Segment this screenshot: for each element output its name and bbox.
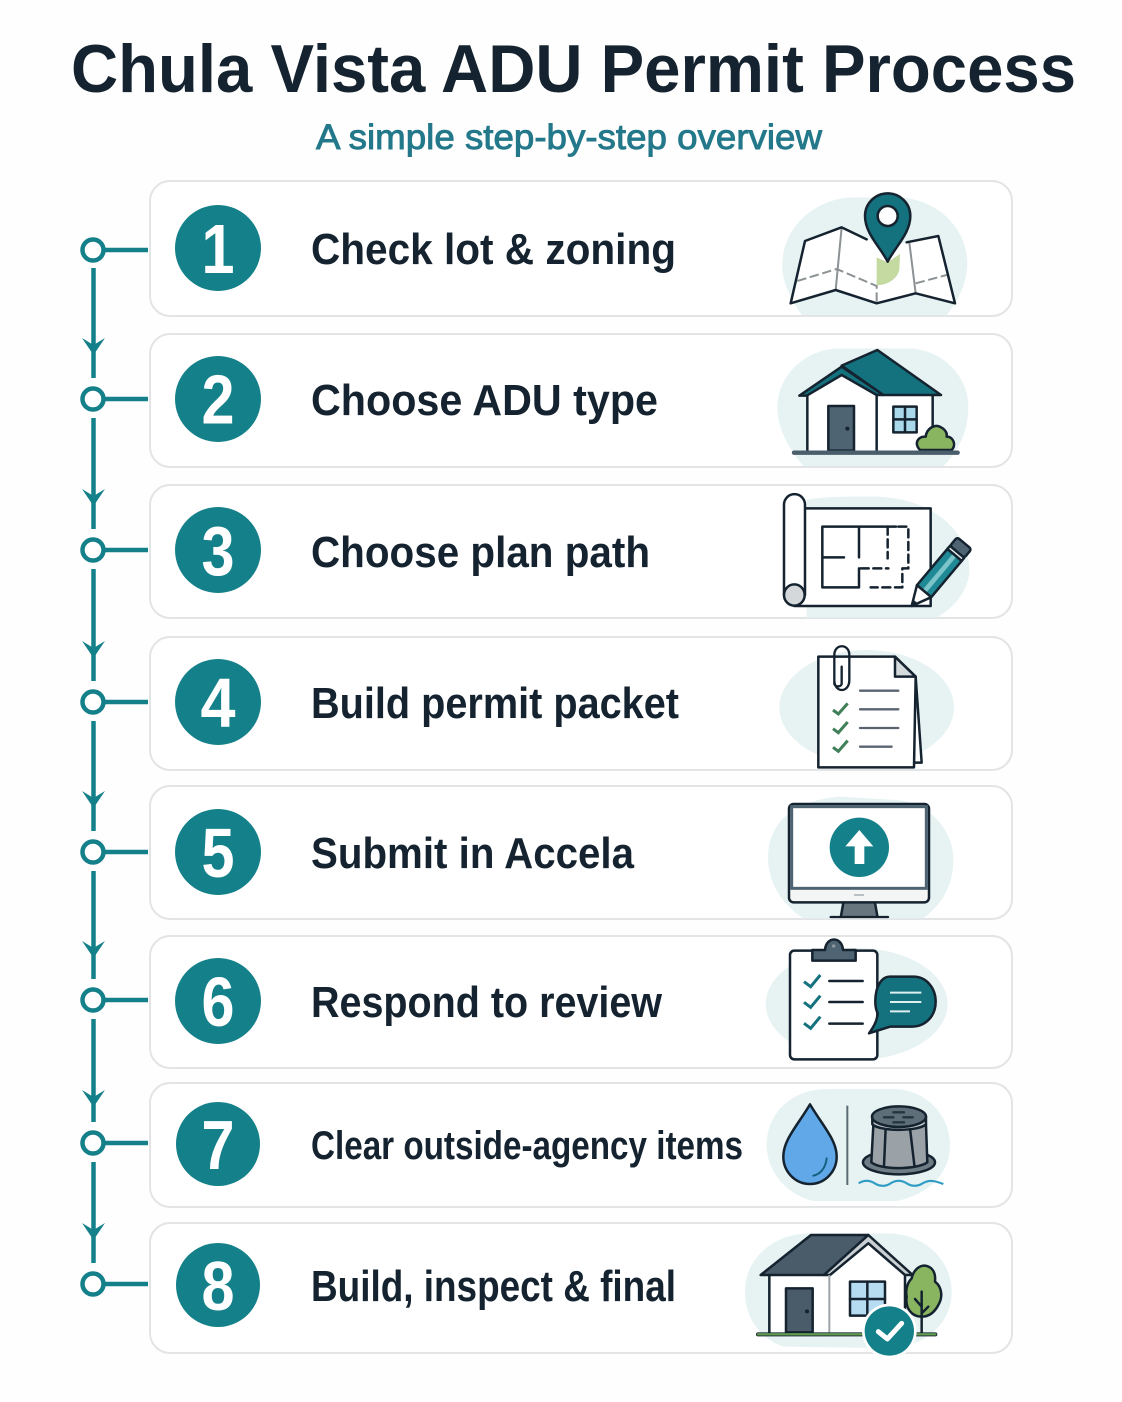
step 8 panel [150,1223,1012,1358]
step 1 panel [150,181,1012,316]
step 5 label: Submit in Accela [311,829,634,878]
step 6 label: Respond to review [311,978,663,1027]
subtitle: A simple step-by-step overview [316,118,823,157]
number badge 6: 6 [202,963,234,1041]
step 1 label: Check lot & zoning [311,225,676,274]
icon: map with location pin [782,193,967,315]
step 4 label: Build permit packet [311,679,679,728]
title: Chula Vista ADU Permit Process [71,31,1076,107]
number badge 1 [175,205,261,291]
card 1 [150,181,1012,316]
step 6 panel [150,936,1012,1068]
step 5 panel [150,786,1012,919]
step 3 panel [150,485,1012,618]
step 2 label: Choose ADU type [311,376,658,425]
number badge 7: 7 [202,1106,234,1184]
icon: finished house with check badge [745,1233,952,1358]
number badge 2: 2 [202,360,234,438]
number badge 5 [175,809,261,895]
card 6 [150,936,1012,1068]
icon: clipboard with speech bubble [766,939,948,1060]
icon: blueprint and pencil [784,494,972,618]
number badge 8: 8 [202,1247,234,1325]
number badge 2 [175,356,261,442]
number badge 4: 4 [200,664,236,742]
icon: house with teal roof [777,348,968,466]
icon: document with paperclip and checklist [779,646,954,767]
number badge 3 [175,507,261,593]
card 7 [150,1083,1012,1207]
number badge 5: 5 [202,814,234,892]
step 7 label: Clear outside-agency items [311,1124,743,1168]
icon: water drop and stormwater riser [767,1089,950,1201]
step 8 label: Build, inspect & final [311,1262,676,1311]
number badge 4 [175,659,261,745]
card 5 [150,786,1012,919]
number badge 3: 3 [202,512,234,590]
step 3 label: Choose plan path [311,528,650,577]
timeline connector [82,240,148,1294]
number badge 1: 1 [202,210,234,288]
card 4 [150,637,1012,770]
card 3 [150,485,1012,618]
step 7 panel [150,1083,1012,1207]
number badge 6 [175,958,261,1044]
card 8 [150,1223,1012,1353]
step 4 panel [150,637,1012,770]
step 2 panel [150,334,1012,467]
card 2 [150,334,1012,467]
icon: monitor with upload arrow [768,797,953,918]
number badge 8 [176,1243,260,1327]
number badge 7 [176,1102,260,1186]
